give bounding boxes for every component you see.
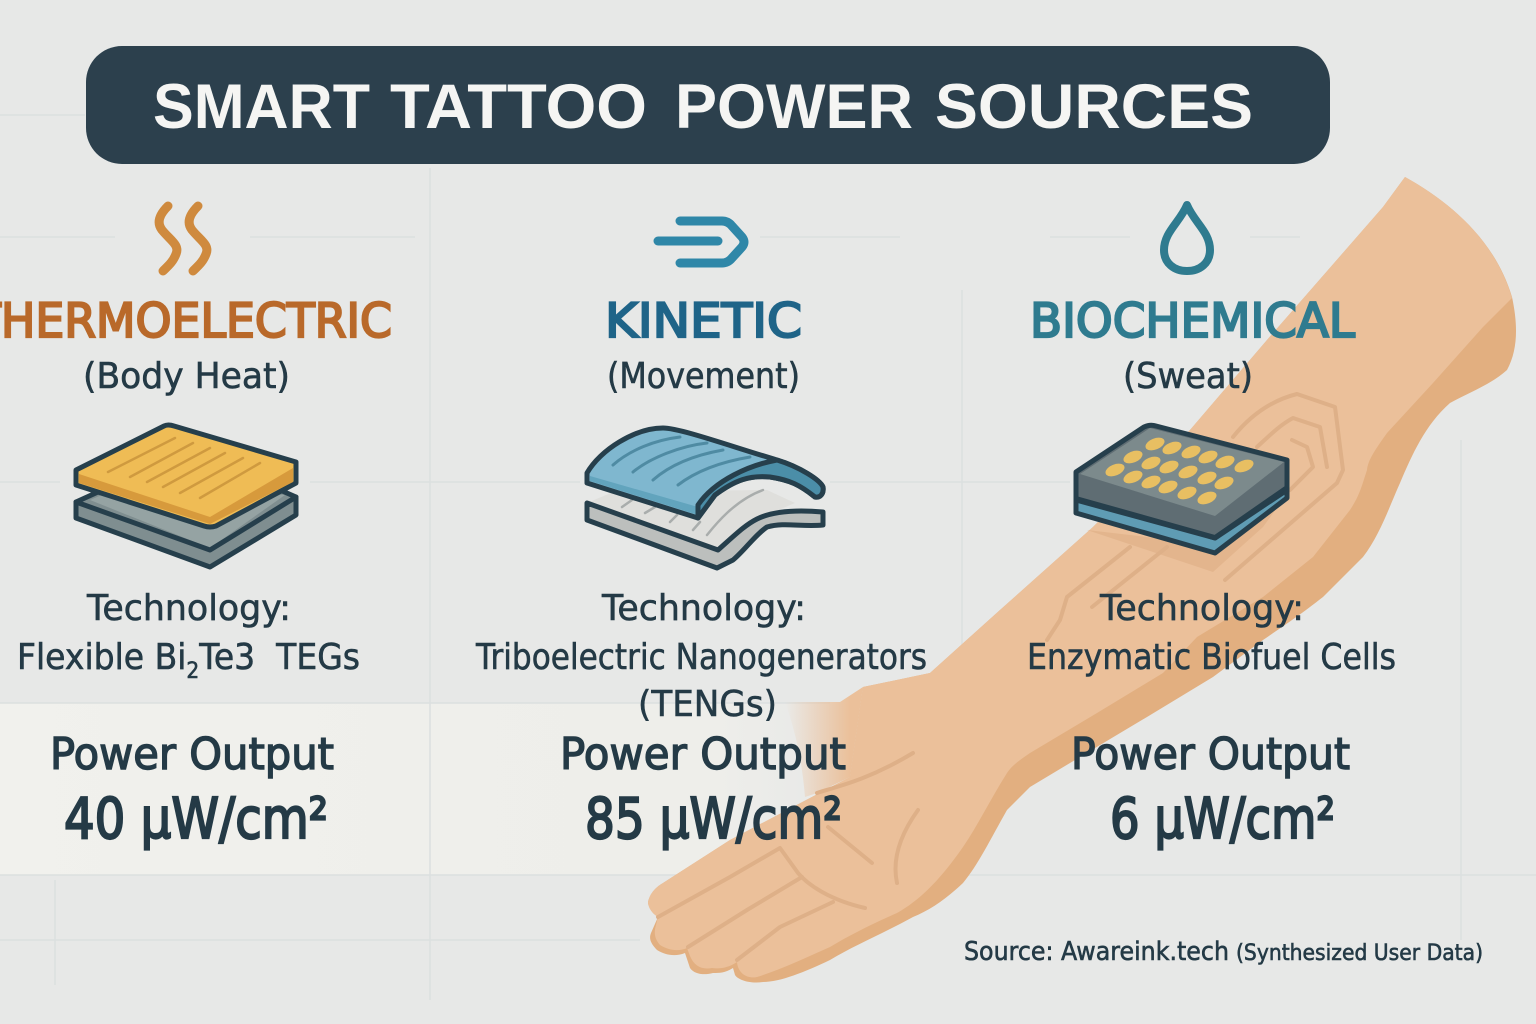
icon: biofuel cell chip <box>1076 425 1287 553</box>
technology name: Enzymatic Biofuel Cells <box>1027 637 1396 678</box>
title banner: SMART <box>153 72 370 142</box>
source note <box>964 937 1483 967</box>
technology label: Technology: <box>601 588 806 629</box>
power output label: Power Output <box>1071 729 1350 780</box>
technology name: Te3 TEGs <box>198 637 360 678</box>
icon: motion arrow <box>658 221 744 263</box>
technology abbreviation: (TENGs) <box>638 684 777 725</box>
illustration: forearm and hand <box>648 177 1516 983</box>
technology name: 2 <box>186 659 199 684</box>
icon: heat waves <box>159 206 207 271</box>
icon: flexible TEG layers <box>76 425 296 567</box>
technology name: Triboelectric Nanogenerators <box>475 637 927 678</box>
source note: (Synthesized User Data) <box>1236 941 1483 966</box>
heading: kinetic: KINETIC <box>605 294 802 349</box>
power output value: 40 µW/cm² <box>64 787 328 852</box>
power output label: Power Output <box>50 729 334 780</box>
source note: Source: Awareink.tech <box>964 937 1229 967</box>
panel: thermoelectric <box>0 206 392 852</box>
title banner: POWER <box>675 72 913 142</box>
technology label: Technology: <box>86 588 291 629</box>
title banner: TATTOO <box>390 72 647 142</box>
heading: biochemical: BIOCHEMICAL <box>1030 294 1355 349</box>
technology name: Flexible Bi <box>17 637 202 678</box>
subheading: sweat: (Sweat) <box>1123 356 1253 397</box>
title banner: SOURCES <box>935 72 1253 142</box>
icon: triboelectric layers <box>587 428 823 568</box>
subheading: movement: (Movement) <box>607 356 800 397</box>
title banner <box>86 46 1330 164</box>
technology label: Technology: <box>1099 588 1304 629</box>
subheading: body heat: (Body Heat) <box>83 356 290 397</box>
power output value: 85 µW/cm² <box>585 787 842 852</box>
panel: kinetic <box>475 221 927 852</box>
panel: biochemical <box>1027 205 1396 852</box>
icon: sweat drop <box>1164 205 1210 271</box>
power output label: Power Output <box>560 729 846 780</box>
power output value: 6 µW/cm² <box>1110 787 1335 852</box>
